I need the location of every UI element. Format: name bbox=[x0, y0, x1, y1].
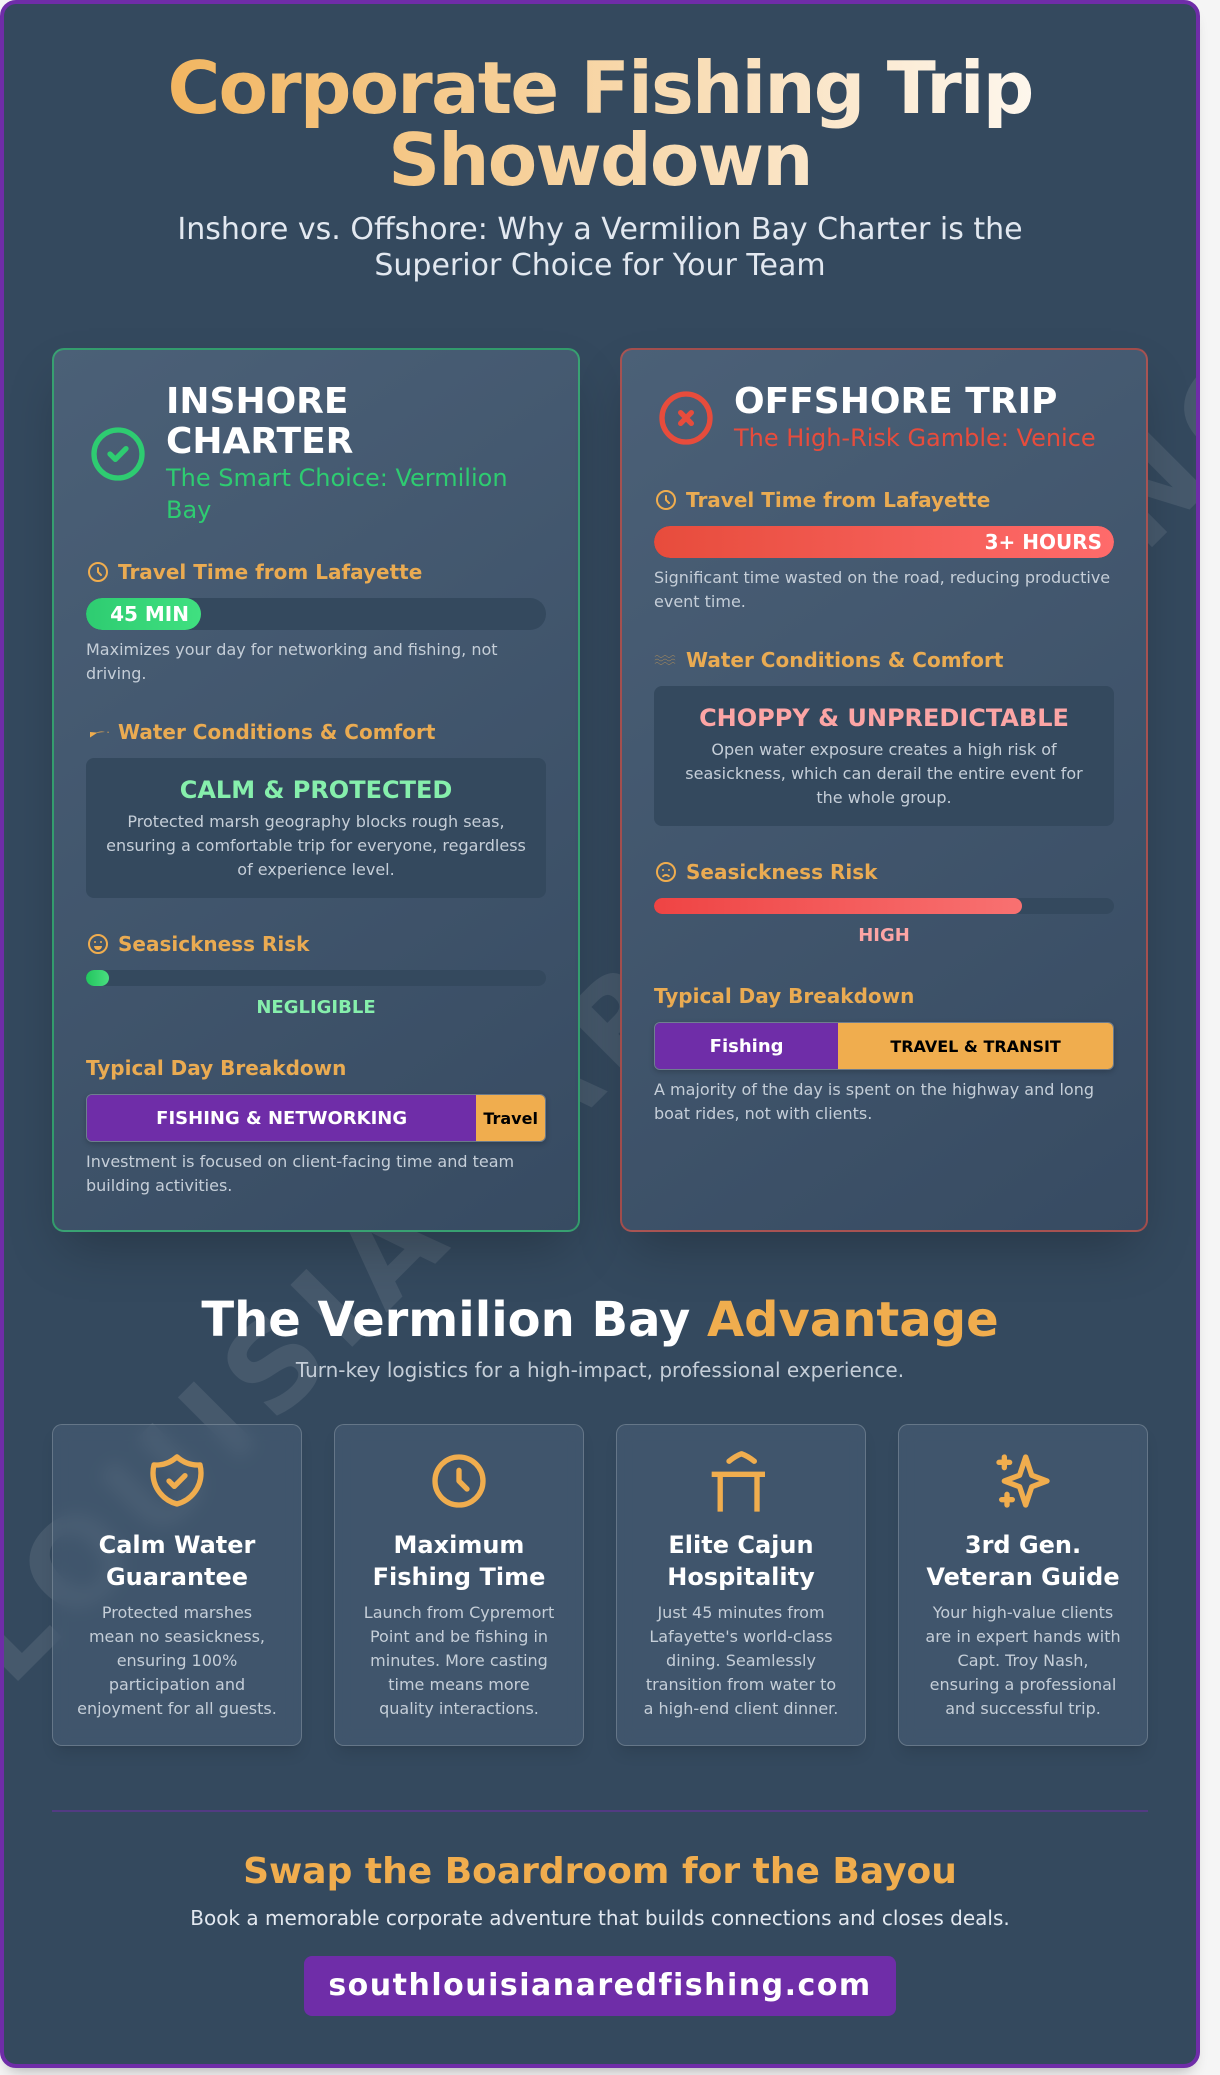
card: elite cajun hospitality: Lafayette's world-class bbox=[649, 1627, 833, 1646]
water conditions box: CHOPPY & UNPREDICTABLE bbox=[699, 704, 1069, 732]
icon: green check circle bbox=[91, 427, 145, 481]
travel time bar: 45 min: 45 MIN bbox=[110, 602, 189, 626]
seasickness bar: high bbox=[654, 898, 1114, 914]
card: veteran guide: and successful trip. bbox=[945, 1699, 1101, 1718]
card: calm water guarantee: Calm Water bbox=[99, 1531, 255, 1559]
typical day note: Investment is focused on client-facing time and team bbox=[86, 1152, 514, 1171]
water conditions label: Water Conditions & Comfort bbox=[686, 648, 1003, 672]
water conditions box: Open water exposure creates a high risk of bbox=[711, 740, 1057, 759]
card: veteran guide: ensuring a professional bbox=[930, 1675, 1116, 1694]
icon: red x circle bbox=[659, 391, 713, 445]
typical day split bar: Travel bbox=[483, 1108, 538, 1128]
card: calm water guarantee: enjoyment for all guests. bbox=[77, 1699, 277, 1718]
card: veteran guide: Veteran Guide bbox=[926, 1563, 1120, 1591]
icon: sparkles bbox=[996, 1454, 1050, 1508]
card: elite cajun hospitality: Elite Cajun bbox=[668, 1531, 814, 1559]
inshore heading text: The Smart Choice: Vermilion bbox=[166, 464, 508, 492]
seasickness bar: negligible bbox=[86, 970, 546, 986]
water conditions box: the whole group. bbox=[816, 788, 952, 807]
typical day label: Typical Day Breakdown bbox=[86, 1056, 346, 1080]
subtitle: Inshore vs. Offshore: Why a Vermilion Bay Charter is the bbox=[177, 212, 1023, 247]
water conditions box bbox=[86, 758, 546, 898]
card: maximum fishing time: minutes. More casting bbox=[370, 1651, 548, 1670]
inshore heading text: Bay bbox=[166, 496, 211, 524]
card: veteran guide: are in expert hands with bbox=[925, 1627, 1121, 1646]
water conditions label: Water Conditions & Comfort bbox=[118, 720, 435, 744]
typical day label: Typical Day Breakdown bbox=[654, 984, 914, 1008]
panel: offshore trip bbox=[620, 348, 1148, 1232]
typical day split bar: TRAVEL & TRANSIT bbox=[890, 1036, 1061, 1056]
travel time bar: 3+ hours bbox=[654, 526, 1114, 558]
inshore heading text bbox=[166, 381, 508, 524]
card: veteran guide: Capt. Troy Nash, bbox=[958, 1651, 1088, 1670]
card: maximum fishing time: quality interactions. bbox=[379, 1699, 539, 1718]
panel: inshore charter bbox=[52, 348, 580, 1232]
travel time note: Significant time wasted on the road, reducing productive bbox=[654, 568, 1110, 587]
card: veteran guide bbox=[898, 1424, 1148, 1746]
typical day note: building activities. bbox=[86, 1176, 232, 1195]
card: calm water guarantee bbox=[52, 1424, 302, 1746]
typical day note: boat rides, not with clients. bbox=[654, 1104, 872, 1123]
card: maximum fishing time bbox=[334, 1424, 584, 1746]
card: elite cajun hospitality bbox=[616, 1424, 866, 1746]
seasickness risk label: Seasickness Risk bbox=[118, 932, 309, 956]
travel time label: Travel Time from Lafayette bbox=[118, 560, 422, 584]
card: calm water guarantee: Guarantee bbox=[106, 1563, 248, 1591]
typical day split bar: FISHING & NETWORKING bbox=[156, 1108, 407, 1128]
call to action: Swap the Boardroom for the Bayou bbox=[243, 1851, 957, 1892]
inshore heading text: INSHORE bbox=[166, 381, 348, 422]
typical day note bbox=[86, 1152, 514, 1195]
travel time note: driving. bbox=[86, 664, 146, 683]
advantage heading bbox=[201, 1292, 999, 1382]
advantage cards bbox=[52, 1424, 1148, 1748]
seasickness risk label: Seasickness Risk bbox=[686, 860, 877, 884]
icon: shield check bbox=[150, 1454, 204, 1507]
water conditions box: seasickness, which can derail the entire event for bbox=[685, 764, 1083, 783]
card: elite cajun hospitality: dining. Seamlessly bbox=[666, 1651, 816, 1670]
typical day note: A majority of the day is spent on the highway and long bbox=[654, 1080, 1094, 1099]
water conditions box bbox=[654, 686, 1114, 826]
card: veteran guide: 3rd Gen. bbox=[965, 1531, 1081, 1559]
travel time label: Travel Time from Lafayette bbox=[686, 488, 990, 512]
comparison panels bbox=[52, 348, 1150, 1260]
website button bbox=[304, 1956, 896, 2016]
card: maximum fishing time: time means more bbox=[388, 1675, 530, 1694]
advantage heading: The Vermilion Bay Advantage bbox=[201, 1292, 999, 1348]
typical day split bar bbox=[86, 1094, 546, 1142]
card: elite cajun hospitality: Hospitality bbox=[667, 1563, 815, 1591]
inshore header bbox=[91, 381, 508, 524]
water conditions box: Protected marsh geography blocks rough seas, bbox=[127, 812, 505, 831]
advantage heading: Turn-key logistics for a high-impact, professional experience. bbox=[296, 1358, 904, 1382]
card: calm water guarantee: mean no seasickness, bbox=[89, 1627, 265, 1646]
inshore heading text: CHARTER bbox=[166, 421, 353, 462]
card: veteran guide: Your high-value clients bbox=[933, 1603, 1113, 1622]
icon: clock bbox=[432, 1454, 486, 1508]
card: elite cajun hospitality: a high-end client dinner. bbox=[644, 1699, 838, 1718]
card: calm water guarantee: Protected marshes bbox=[102, 1603, 252, 1622]
offshore heading text: The High-Risk Gamble: Venice bbox=[734, 424, 1096, 452]
offshore heading text bbox=[734, 381, 1096, 452]
travel time bar: 45 min bbox=[86, 598, 546, 630]
subtitle: Superior Choice for Your Team bbox=[374, 248, 826, 283]
water conditions box: ensuring a comfortable trip for everyone, regardless bbox=[106, 836, 526, 855]
card: maximum fishing time: Maximum bbox=[394, 1531, 524, 1559]
card: maximum fishing time: Launch from Cypremort bbox=[364, 1603, 554, 1622]
website button: southlouisianaredfishing.com bbox=[328, 1968, 872, 2003]
card: maximum fishing time: Point and be fishing in bbox=[370, 1627, 548, 1646]
subtitle bbox=[177, 212, 1023, 283]
travel time note bbox=[86, 640, 498, 683]
title bbox=[52, 52, 1148, 196]
icon: dining table bbox=[712, 1451, 765, 1512]
typical day split bar bbox=[654, 1022, 1114, 1070]
call to action: Book a memorable corporate adventure that builds connections and closes deals. bbox=[190, 1906, 1010, 1930]
travel time note: Maximizes your day for networking and fishing, not bbox=[86, 640, 498, 659]
seasickness value: HIGH bbox=[858, 925, 910, 946]
card: elite cajun hospitality: transition from water to bbox=[646, 1675, 836, 1694]
typical day note bbox=[654, 1080, 1094, 1123]
call to action bbox=[190, 1851, 1010, 2016]
card: calm water guarantee: participation and bbox=[109, 1675, 245, 1694]
water conditions box: of experience level. bbox=[237, 860, 395, 879]
title: Showdown bbox=[388, 118, 812, 202]
card: maximum fishing time: Fishing Time bbox=[373, 1563, 545, 1591]
typical day split bar: Fishing bbox=[710, 1036, 784, 1056]
travel time note bbox=[654, 568, 1110, 611]
water conditions box: CALM & PROTECTED bbox=[180, 776, 452, 804]
travel time note: event time. bbox=[654, 592, 746, 611]
seasickness value: NEGLIGIBLE bbox=[256, 997, 376, 1018]
offshore heading text: OFFSHORE TRIP bbox=[734, 381, 1057, 422]
travel time bar: 3+ hours: 3+ HOURS bbox=[985, 530, 1102, 554]
card: elite cajun hospitality: Just 45 minutes from bbox=[657, 1603, 825, 1622]
card: calm water guarantee: ensuring 100% bbox=[117, 1651, 237, 1670]
title: Corporate Fishing Trip bbox=[167, 46, 1033, 130]
offshore header bbox=[659, 381, 1096, 452]
